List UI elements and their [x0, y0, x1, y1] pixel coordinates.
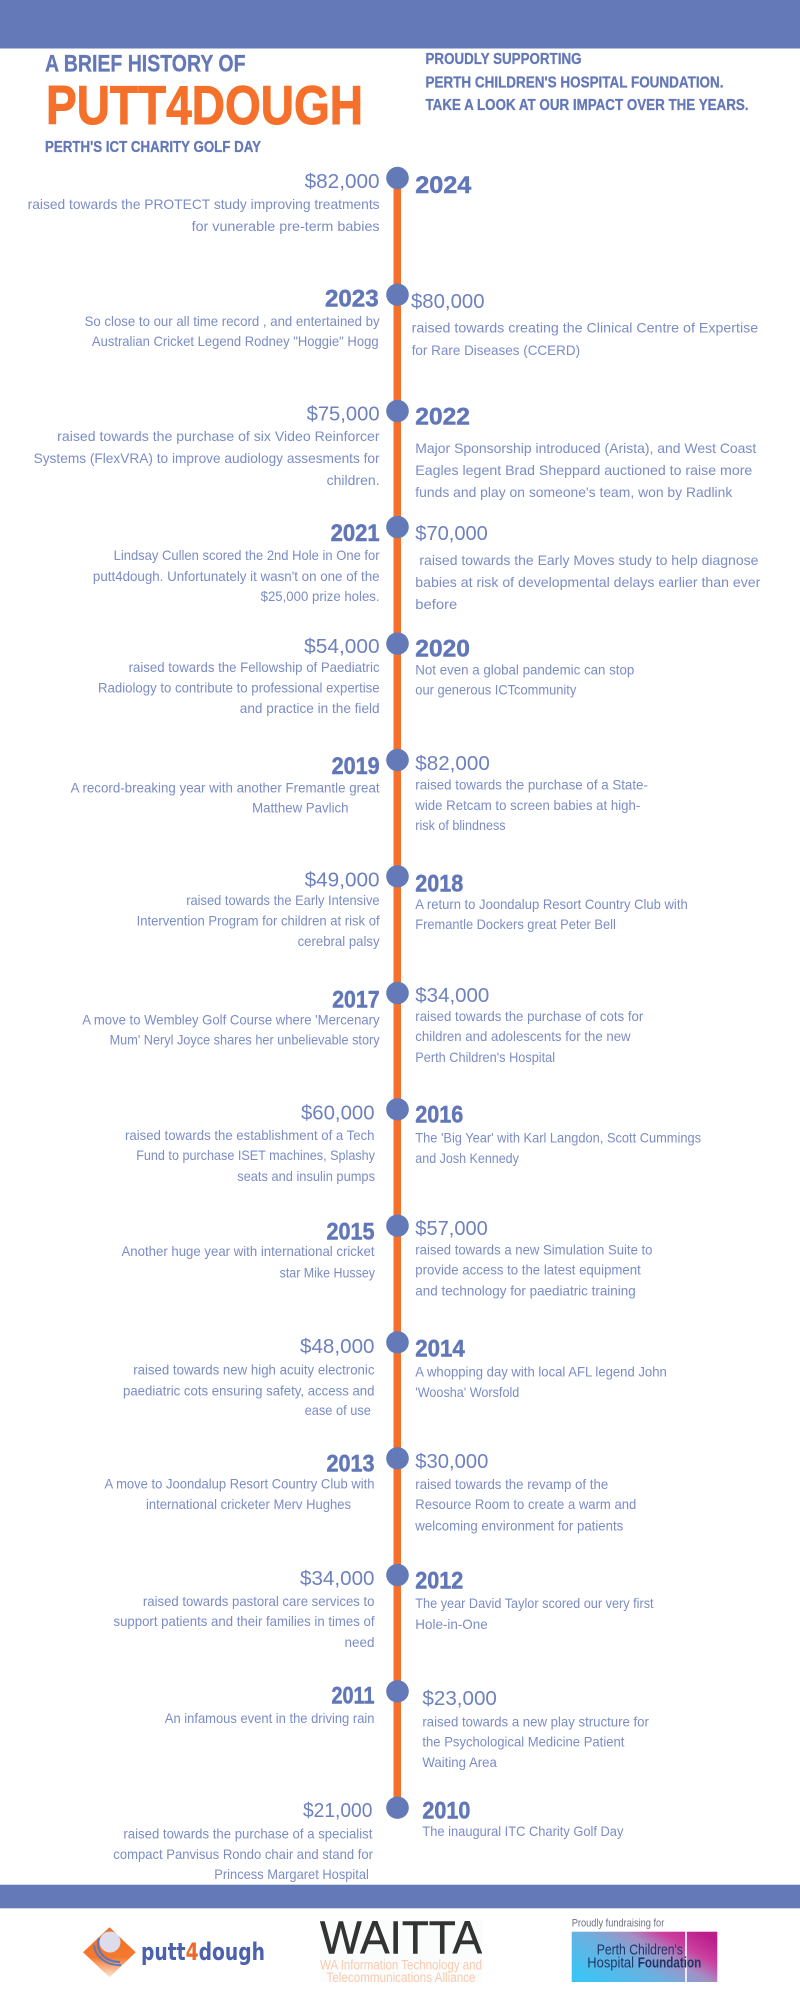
impact text: provide access to the latest equipment: [415, 1261, 641, 1277]
impact text: raised towards pastoral care services to: [143, 1593, 375, 1609]
impact text: children and adolescents for the new: [415, 1028, 631, 1044]
year: 2021: [331, 520, 380, 547]
description: A move to Wembley Golf Course where 'Mercenary: [82, 1011, 380, 1027]
marker: [386, 516, 409, 538]
year: 2024: [415, 172, 472, 199]
impact text: children.: [327, 472, 380, 488]
marker: [386, 1098, 409, 1121]
gradient panel: [572, 1932, 717, 1982]
impact text: raised towards the purchase of cots for: [415, 1008, 644, 1024]
impact text: [34, 428, 380, 488]
logo: Perth Children's Hospital Foundation: [572, 1918, 717, 1982]
description: Eagles legent Brad Sheppard auctioned to raise more: [415, 462, 753, 478]
amount: $48,000: [300, 1336, 374, 1358]
impact text: [422, 1713, 649, 1770]
impact text: raised towards the Early Intensive: [186, 892, 380, 908]
header: supporting statement: PERTH CHILDREN'S HOSPITAL FOUNDATION.: [426, 74, 724, 91]
bottom banner: [0, 1885, 800, 1908]
year: 2016: [415, 1101, 463, 1128]
header: supporting statement: [426, 51, 748, 114]
impact text: [113, 1825, 373, 1882]
timeline entry: 2017: [82, 982, 644, 1065]
impact text: and technology for paediatric training: [415, 1282, 636, 1298]
header: supporting statement: TAKE A LOOK AT OUR IMPACT OVER THE YEARS.: [426, 97, 748, 114]
amount: $30,000: [415, 1451, 488, 1473]
impact text: cerebral palsy: [298, 933, 380, 949]
amount: $21,000: [303, 1800, 372, 1822]
logo: WAITTA: Telecommunications Alliance: [326, 1970, 476, 1985]
marker: [386, 167, 409, 189]
marker: [386, 749, 409, 771]
icon: diamond with golf ball: [83, 1927, 136, 1977]
marker: [386, 1447, 409, 1470]
timeline vertical line: [394, 170, 401, 1805]
impact text: raised towards new high acuity electronic: [133, 1361, 374, 1377]
wordmark: WAITTA: [320, 1911, 482, 1963]
top banner: [0, 0, 800, 48]
marker: [386, 400, 409, 422]
impact text: raised towards the purchase of six Video Reinforcer: [57, 428, 380, 444]
impact text: wide Retcam to screen babies at high-: [414, 797, 641, 813]
description: [415, 661, 634, 697]
impact text: Perth Children's Hospital: [415, 1049, 555, 1065]
impact text: [415, 552, 761, 612]
timeline entry: 2012: [114, 1564, 654, 1650]
impact text: [415, 1241, 653, 1298]
description: Major Sponsorship introduced (Arista), and West Coast: [415, 440, 756, 456]
amount: $80,000: [411, 291, 484, 313]
impact text: [98, 659, 380, 716]
header: supporting statement: PROUDLY SUPPORTING: [426, 51, 582, 68]
impact text: ease of use: [305, 1402, 371, 1418]
marker: [386, 1564, 409, 1586]
description: 'Woosha' Worsfold: [415, 1384, 519, 1400]
description: [415, 1363, 667, 1400]
description: Mum' Neryl Joyce shares her unbelievable story: [110, 1031, 380, 1047]
impact text: raised towards a new Simulation Suite to: [415, 1241, 653, 1257]
description: [93, 547, 380, 604]
impact text: support patients and their families in times of: [114, 1613, 375, 1629]
description: An infamous event in the driving rain: [165, 1710, 374, 1726]
impact text: [137, 892, 380, 949]
year: 2013: [326, 1451, 374, 1478]
subheading: charity golf day: PERTH'S ICT CHARITY GOLF DAY: [45, 139, 262, 156]
timeline entry: 2021: [93, 516, 761, 612]
impact text: [412, 320, 758, 358]
impact text: Resource Room to create a warm and: [415, 1496, 636, 1512]
impact text: for Rare Diseases (CCERD): [412, 342, 580, 358]
timeline entry: 2018: [137, 865, 688, 949]
description: The year David Taylor scored our very first: [415, 1595, 654, 1611]
impact text: [114, 1593, 375, 1650]
impact text: Princess Margaret Hospital: [214, 1866, 369, 1882]
impact text: babies at risk of developmental delays earlier than ever: [415, 574, 761, 590]
amount: $75,000: [307, 403, 380, 425]
description: Not even a global pandemic can stop: [415, 661, 634, 677]
description: [415, 896, 688, 932]
impact text: Radiology to contribute to professional expertise: [98, 679, 380, 695]
amount: $23,000: [422, 1688, 497, 1710]
timeline entry: 2013: [104, 1447, 636, 1533]
tagline: WA Information Technology and: [320, 1957, 482, 1972]
amount: $70,000: [415, 523, 488, 545]
year: 2010: [422, 1797, 470, 1824]
description: A whopping day with local AFL legend John: [415, 1363, 667, 1379]
timeline entry: 2015: [122, 1214, 653, 1298]
amount: $60,000: [301, 1102, 374, 1124]
description: Matthew Pavlich: [252, 799, 348, 815]
year: 2023: [325, 286, 379, 313]
impact text: Waiting Area: [422, 1754, 497, 1770]
description: raised towards the PROTECT study improving treatments: [28, 196, 380, 212]
description: A return to Joondalup Resort Country Club with: [415, 896, 688, 912]
amount: $82,000: [415, 753, 490, 775]
impact text: raised towards the Fellowship of Paediatric: [129, 659, 380, 675]
description: Lindsay Cullen scored the 2nd Hole in One for: [114, 547, 380, 563]
impact text: Intervention Program for children at risk of: [137, 912, 380, 928]
year: 2011: [332, 1682, 374, 1709]
description: Fremantle Dockers great Peter Bell: [415, 916, 616, 932]
marker: [386, 632, 409, 655]
amount: $49,000: [305, 869, 380, 891]
impact text: need: [344, 1634, 374, 1650]
description: [104, 1475, 374, 1512]
impact text: [414, 1476, 636, 1533]
description: [415, 1129, 701, 1166]
title: putt4dough: PUTT4DOUGH: [46, 74, 363, 136]
description: Australian Cricket Legend Rodney "Hoggie" Hogg: [92, 333, 379, 349]
description: The 'Big Year' with Karl Langdon, Scott Cummings: [415, 1129, 701, 1145]
year: 2015: [326, 1218, 374, 1245]
timeline entry: 2020: [98, 632, 634, 716]
impact text: Fund to purchase ISET machines, Splashy: [136, 1147, 375, 1163]
marker: [386, 982, 409, 1004]
description: [28, 196, 380, 234]
impact text: Systems (FlexVRA) to improve audiology assesments for: [34, 450, 380, 466]
impact text: raised towards the purchase of a State-: [415, 776, 648, 792]
description: [85, 313, 380, 349]
marker: [386, 1680, 409, 1703]
description: Another huge year with international cricket: [122, 1243, 375, 1259]
logo text: Foundation: [638, 1955, 701, 1971]
impact text: the Psychological Medicine Patient: [422, 1733, 625, 1749]
description: [82, 1011, 380, 1047]
impact text: and practice in the field: [240, 700, 380, 716]
amount: $82,000: [305, 171, 380, 193]
impact text: raised towards creating the Clinical Centre of Expertise: [412, 320, 758, 336]
description: Hole-in-One: [415, 1616, 488, 1632]
heading: a brief history of: A BRIEF HISTORY OF: [45, 51, 246, 78]
timeline entry: 2024: [28, 167, 472, 234]
header: title block: [45, 51, 363, 156]
timeline entry: 2019: [71, 749, 648, 833]
amount: $57,000: [415, 1218, 488, 1240]
impact text: paediatric cots ensuring safety, access and: [123, 1382, 374, 1398]
impact text: [415, 1008, 644, 1065]
impact text: risk of blindness: [415, 817, 506, 833]
year: 2020: [415, 636, 470, 663]
marker: [386, 284, 409, 306]
marker: [386, 1331, 409, 1354]
impact text: raised towards the Early Moves study to help diagnose: [419, 552, 759, 568]
impact text: welcoming environment for patients: [414, 1517, 623, 1533]
timeline entry: 2016: [125, 1098, 701, 1184]
year: 2018: [415, 870, 463, 897]
year: 2012: [415, 1568, 463, 1595]
description: and Josh Kennedy: [415, 1150, 519, 1166]
timeline entry: 2023: [85, 284, 758, 358]
impact text: before: [415, 596, 458, 612]
amount: $34,000: [300, 1568, 374, 1590]
impact text: raised towards the revamp of the: [415, 1476, 608, 1492]
logo text: Perth Children's: [597, 1942, 683, 1958]
logo text: Hospital: [587, 1955, 634, 1971]
description: international cricketer Merv Hughes: [146, 1496, 351, 1512]
amount: $54,000: [304, 636, 380, 658]
impact text: seats and insulin pumps: [237, 1168, 375, 1184]
description: [415, 440, 756, 500]
description: [415, 1595, 654, 1632]
description: $25,000 prize holes.: [261, 588, 380, 604]
description: [122, 1243, 375, 1280]
impact text: raised towards the purchase of a specialist: [123, 1825, 372, 1841]
logo: putt4dough: [83, 1927, 265, 1977]
marker: [386, 1796, 409, 1819]
impact text: raised towards a new play structure for: [422, 1713, 649, 1729]
amount: $34,000: [415, 985, 489, 1007]
wordmark: putt4dough: [141, 1938, 265, 1966]
logo: WAITTA: [320, 1911, 482, 1985]
description: funds and play on someone's team, won by Radlink: [415, 484, 733, 500]
description: [71, 779, 380, 815]
description: for vunerable pre-term babies: [192, 218, 380, 234]
impact text: [414, 776, 648, 833]
year: 2017: [332, 986, 380, 1013]
caption: Proudly fundraising for: [572, 1918, 665, 1930]
impact text: [125, 1127, 375, 1184]
description: A record-breaking year with another Fremantle great: [71, 779, 380, 795]
description: putt4dough. Unfortunately it wasn't on one of the: [93, 568, 380, 584]
description: The inaugural ITC Charity Golf Day: [422, 1823, 623, 1839]
timeline entry: 2014: [123, 1331, 667, 1418]
marker: [386, 865, 409, 888]
description: our generous ICTcommunity: [415, 681, 576, 697]
year: 2019: [332, 753, 380, 780]
timeline entry: 2010: [113, 1796, 623, 1882]
year: 2014: [415, 1336, 465, 1363]
timeline entry: 2011: [165, 1680, 649, 1770]
impact text: [123, 1361, 374, 1418]
year: 2022: [415, 404, 470, 431]
description: So close to our all time record , and entertained by: [85, 313, 380, 329]
timeline entry: 2022: [34, 400, 756, 500]
description: star Mike Hussey: [280, 1264, 375, 1280]
impact text: raised towards the establishment of a Tech: [125, 1127, 374, 1143]
description: A move to Joondalup Resort Country Club with: [104, 1475, 374, 1491]
logo text: [587, 1942, 701, 1971]
marker: [386, 1214, 409, 1237]
impact text: compact Panvisus Rondo chair and stand for: [113, 1846, 373, 1862]
